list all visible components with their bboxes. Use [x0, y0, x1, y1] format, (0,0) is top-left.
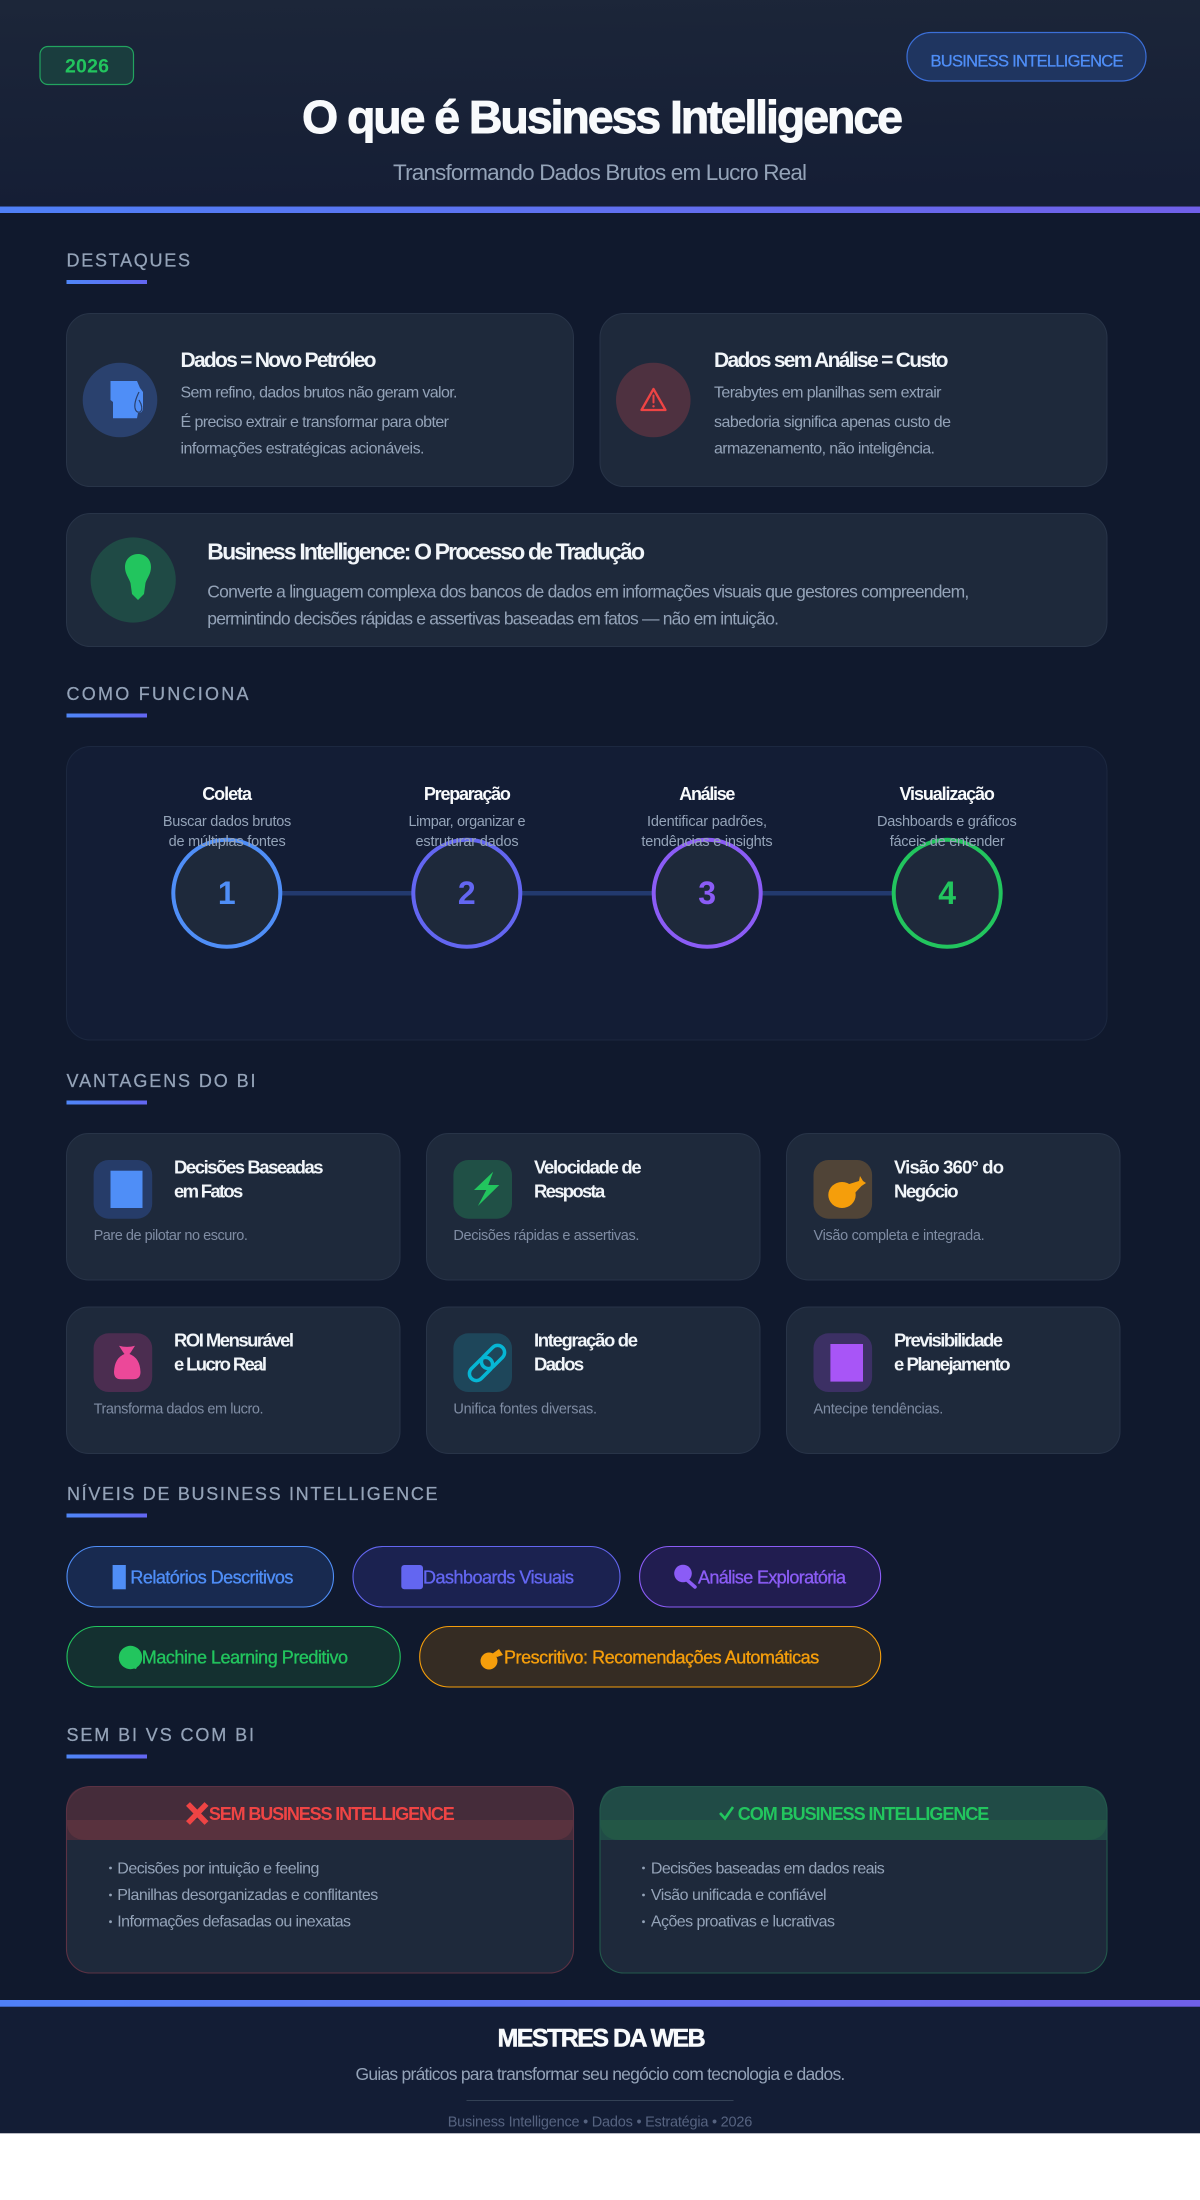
heading: como funciona: COMO FUNCIONA: [66, 684, 248, 704]
step 2: 2: [458, 875, 476, 911]
icon: report: [113, 1565, 126, 1589]
panel: roi mensurável: [66, 1307, 400, 1454]
panel: process timeline: [66, 746, 1107, 1040]
panel header band: SEM BUSINESS INTELLIGENCE: [209, 1804, 455, 1824]
list: [642, 1860, 885, 1931]
step 1: 1: [218, 875, 236, 911]
step 1: [163, 784, 291, 947]
pill: prescritivo: Prescritivo: Recomendações Automáticas: [504, 1647, 819, 1667]
list: Informações defasadas ou inexatas: [117, 1914, 351, 1931]
panel: processo de tradução: [66, 514, 1107, 646]
panel header band: [600, 1786, 1107, 1840]
card text: Decisões rápidas e assertivas.: [453, 1228, 639, 1244]
card text: sabedoria significa apenas custo de: [714, 414, 951, 431]
card text: armazenamento, não inteligência.: [714, 441, 935, 458]
card title: Dados: [534, 1354, 584, 1375]
card text: Visão completa e integrada.: [814, 1228, 985, 1244]
icon: money bag: [94, 1333, 152, 1392]
card text: Sem refino, dados brutos não geram valor.: [180, 385, 458, 402]
card title: Visão 360° do: [894, 1156, 1004, 1177]
card title: [534, 1156, 642, 1201]
card title: [894, 1330, 1011, 1375]
pill: machine learning: Machine Learning Preditivo: [142, 1647, 348, 1667]
footer keywords: Business Intelligence • Dados • Estratégia • 2026: [448, 2115, 752, 2131]
year badge: [40, 46, 134, 84]
step 4: Visualização: [900, 784, 995, 804]
heading: vantagens: [66, 1071, 256, 1104]
heading: destaques: DESTAQUES: [66, 251, 190, 271]
step 4: 4: [938, 875, 956, 911]
pill: dashboards visuais: [353, 1546, 620, 1607]
list: [109, 1860, 378, 1931]
step 1: Buscar dados brutos: [163, 814, 291, 830]
icon: dashboard: [401, 1565, 423, 1589]
card title: Resposta: [534, 1180, 606, 1201]
list: Planilhas desorganizadas e conflitantes: [117, 1887, 378, 1904]
panel: previsibilidade: [786, 1307, 1120, 1454]
topic badge: [907, 32, 1146, 81]
panel header band: [66, 1786, 574, 1840]
icon: lightning bolt: [453, 1160, 512, 1219]
card title: e Planejamento: [894, 1354, 1011, 1375]
icon: cross: [188, 1804, 206, 1823]
pill: prescritivo: [420, 1626, 881, 1687]
heading: como funciona: [66, 684, 248, 718]
subtitle: Transformando Dados Brutos em Lucro Real: [393, 160, 807, 185]
pill: análise exploratória: Análise Exploratória: [698, 1567, 847, 1587]
card title: Previsibilidade: [894, 1330, 1003, 1351]
card title: ROI Mensurável: [174, 1330, 294, 1351]
card text: Converte a linguagem complexa dos bancos de dados em informações visuais que gestores compreendem,: [207, 582, 969, 602]
topic badge: BUSINESS INTELLIGENCE: [930, 53, 1124, 71]
step 2: estruturar dados: [416, 834, 519, 850]
panel: integração de dados: [426, 1307, 760, 1454]
card title: Business Intelligence: O Processo de Tradução: [207, 538, 645, 564]
panel: dados sem análise: [600, 314, 1107, 486]
panel: visão 360: [786, 1134, 1120, 1280]
step 3: Identificar padrões,: [647, 814, 767, 830]
header accent bar: [0, 206, 1200, 213]
step 2: Limpar, organizar e: [408, 814, 526, 830]
heading: níveis: [66, 1484, 437, 1518]
card title: em Fatos: [174, 1180, 243, 1201]
heading: níveis: NÍVEIS DE BUSINESS INTELLIGENCE: [67, 1484, 437, 1504]
card text: É preciso extrair e transformar para obter: [180, 412, 450, 431]
card title: Integração de: [534, 1330, 638, 1351]
step 3: tendências e insights: [641, 834, 773, 850]
step 3: [641, 784, 773, 947]
list: Visão unificada e confiável: [651, 1887, 827, 1904]
step 3: 3: [698, 875, 716, 911]
card text: Pare de pilotar no escuro.: [94, 1228, 248, 1244]
step 4: Dashboards e gráficos: [877, 814, 1017, 830]
icon: magnifier: [674, 1565, 695, 1587]
step 1: Coleta: [202, 784, 253, 804]
card title: Dados = Novo Petróleo: [180, 349, 376, 372]
icon: brain: [119, 1646, 142, 1669]
card title: Decisões Baseadas: [174, 1156, 324, 1177]
panel: dados novo petróleo: [66, 314, 574, 486]
card text: [180, 385, 458, 458]
card text: Terabytes em planilhas sem extrair: [714, 385, 942, 402]
icon: warning triangle: [616, 363, 691, 437]
step 4: fáceis de entender: [890, 834, 1005, 850]
step 2: Preparação: [424, 784, 511, 804]
card text: Transforma dados em lucro.: [94, 1401, 263, 1417]
step 1: de múltiplas fontes: [169, 834, 286, 850]
icon: drumstick: [814, 1160, 872, 1219]
card title: [534, 1330, 638, 1375]
panel: com business intelligence: [600, 1786, 1107, 1973]
card text: [207, 582, 969, 628]
step 2: [408, 784, 526, 947]
card text: Unifica fontes diversas.: [453, 1401, 597, 1417]
heading: destaques: [66, 251, 190, 284]
panel: sem business intelligence: [66, 1786, 574, 1973]
card text: [714, 385, 951, 458]
pill: dashboards visuais: Dashboards Visuais: [423, 1567, 574, 1587]
footer brand: MESTRES DA WEB: [498, 2025, 706, 2053]
card title: Dados sem Análise = Custo: [714, 349, 948, 372]
title: O que é Business Intelligence: [302, 91, 903, 143]
card title: [894, 1156, 1004, 1201]
header: [0, 0, 1200, 206]
heading: vantagens: VANTAGENS DO BI: [66, 1071, 256, 1091]
card text: informações estratégicas acionáveis.: [180, 441, 424, 458]
heading: sem vs com: SEM BI VS COM BI: [66, 1725, 254, 1745]
icon: chain link: [453, 1333, 512, 1392]
card text: Antecipe tendências.: [814, 1401, 943, 1417]
list: Decisões por intuição e feeling: [117, 1860, 319, 1877]
icon: dart: [480, 1649, 503, 1670]
heading: sem vs com: [66, 1725, 254, 1758]
card title: [174, 1330, 294, 1375]
pill: machine learning: [67, 1626, 400, 1687]
pill: análise exploratória: [640, 1546, 881, 1607]
icon: fuel pump: [83, 363, 157, 437]
card title: Velocidade de: [534, 1156, 642, 1177]
panel: velocidade de resposta: [426, 1134, 760, 1280]
footer tagline: Guias práticos para transformar seu negócio com tecnologia e dados.: [356, 2064, 845, 2084]
pill: relatórios descritivos: [67, 1546, 334, 1607]
panel header band: COM BUSINESS INTELLIGENCE: [738, 1804, 989, 1824]
connector line: [282, 891, 892, 896]
icon: light bulb: [91, 537, 176, 623]
card title: Negócio: [894, 1180, 959, 1201]
icon: document: [94, 1160, 152, 1219]
card text: permintindo decisões rápidas e assertivas baseadas em fatos — não em intuição.: [207, 608, 779, 628]
list: Decisões baseadas em dados reais: [651, 1860, 885, 1877]
card title: [174, 1156, 324, 1201]
pill: relatórios descritivos: Relatórios Descritivos: [130, 1567, 293, 1587]
step 4: [877, 784, 1017, 947]
icon: purple document: [814, 1333, 872, 1392]
footer: [0, 2000, 1200, 2133]
icon: check: [720, 1807, 733, 1818]
card title: e Lucro Real: [174, 1354, 267, 1375]
list: Ações proativas e lucrativas: [651, 1914, 835, 1931]
step 3: Análise: [679, 784, 735, 804]
panel: decisões baseadas em fatos: [66, 1134, 400, 1280]
year badge: 2026: [65, 55, 109, 77]
